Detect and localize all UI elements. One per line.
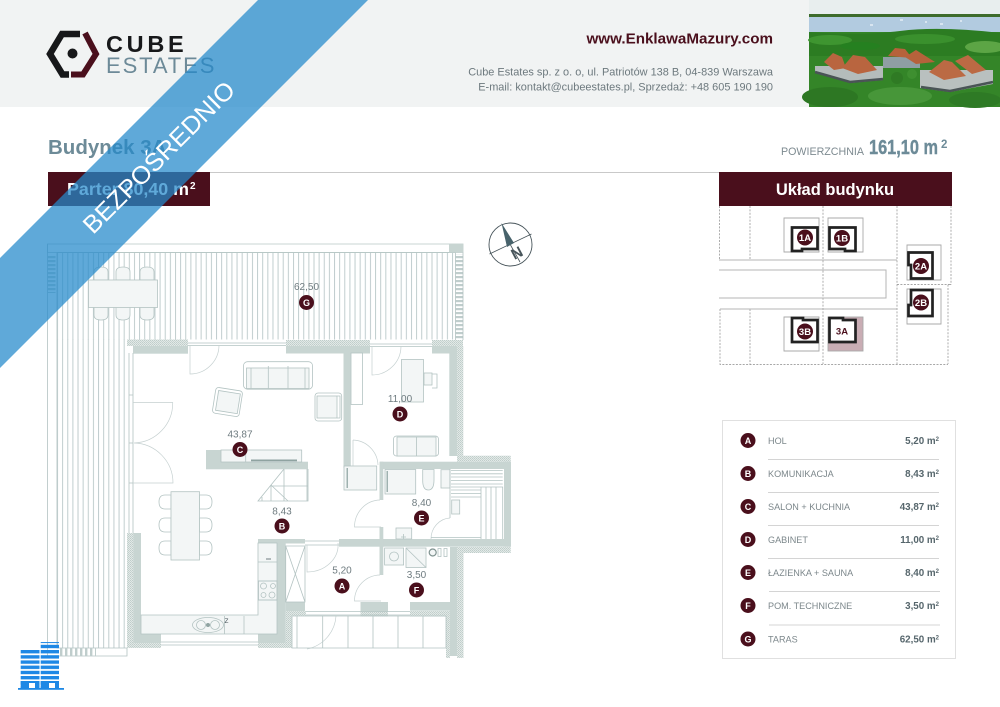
unit 3B: 3B bbox=[799, 327, 811, 338]
legend row C: 43,87 m bbox=[900, 502, 936, 513]
room marker D: 11,00 bbox=[388, 394, 413, 405]
unit 3A current: 3A bbox=[836, 326, 848, 338]
heading: building name: Budynek 3A bbox=[48, 136, 167, 159]
legend row G: TARAS bbox=[768, 634, 798, 644]
unit 2B bbox=[908, 290, 932, 316]
room marker A: A bbox=[339, 581, 346, 591]
total area: 2 bbox=[941, 139, 947, 151]
legend row G: 2 bbox=[936, 636, 940, 642]
armchair left bbox=[212, 387, 243, 417]
room marker G bbox=[294, 282, 319, 310]
website and contact text: www.EnklawaMazury.com bbox=[585, 30, 773, 48]
total area bbox=[781, 136, 947, 159]
room marker C bbox=[227, 430, 253, 457]
legend row G: G bbox=[744, 634, 752, 644]
bathroom fixtures bbox=[385, 470, 450, 539]
legend row E: ŁAZIENKA + SAUNA bbox=[768, 568, 854, 578]
diagonal banner bbox=[0, 0, 368, 368]
legend row D: 11,00 m bbox=[900, 535, 936, 546]
room marker B: 8,43 bbox=[272, 506, 292, 518]
legend row D: D bbox=[745, 535, 752, 545]
compass: N bbox=[508, 243, 526, 263]
icon: blue towers watermark bbox=[18, 642, 64, 690]
sofa bbox=[244, 362, 312, 389]
legend row F bbox=[740, 598, 940, 613]
armchair right bbox=[315, 393, 342, 421]
unit 3A current bbox=[830, 318, 856, 342]
floor plan bbox=[48, 244, 511, 658]
legend row B: KOMUNIKACJA bbox=[768, 469, 835, 479]
room marker F: F bbox=[414, 585, 420, 595]
legend row B: 8,43 m bbox=[905, 469, 936, 480]
room marker E: E bbox=[418, 513, 425, 523]
legend row E bbox=[740, 565, 940, 580]
legend row G bbox=[740, 632, 940, 646]
room legend panel bbox=[722, 420, 956, 658]
entrance steps bbox=[292, 616, 446, 648]
closet bbox=[351, 353, 362, 404]
room marker E: 8,40 bbox=[412, 498, 432, 509]
legend row F: F bbox=[745, 601, 751, 611]
kitchen counter: Z bbox=[224, 618, 228, 625]
kitchen island bbox=[221, 450, 302, 462]
website and contact text: Cube Estates sp. z o. o, ul. Patriotów 138 B, 04-839 Warszawa bbox=[468, 66, 774, 78]
website and contact text bbox=[468, 30, 774, 94]
unit 2B: 2B bbox=[915, 298, 927, 309]
sauna benches bbox=[431, 469, 503, 539]
legend row A: HOL bbox=[768, 436, 787, 446]
dining table and chairs bbox=[159, 492, 212, 560]
legend row C bbox=[740, 499, 940, 514]
photo: aerial render of houses by the lake bbox=[802, 0, 1000, 108]
header rule bbox=[48, 172, 952, 174]
room marker F: 3,50 bbox=[407, 570, 427, 581]
legend row A: 5,20 m bbox=[905, 436, 936, 447]
utility room equipment bbox=[385, 548, 447, 568]
room marker C: C bbox=[237, 445, 244, 455]
room marker G: G bbox=[303, 298, 310, 308]
legend row C: 2 bbox=[936, 503, 940, 509]
legend row E: 2 bbox=[936, 569, 940, 575]
logo: Cube Estates: ESTATES bbox=[106, 53, 216, 78]
legend row B: 2 bbox=[936, 470, 940, 476]
floor label bar bbox=[48, 172, 210, 206]
logo: Cube Estates bbox=[50, 31, 216, 78]
room marker G: 62,50 bbox=[294, 282, 319, 293]
shaft bbox=[286, 546, 305, 602]
legend row F: POM. TECHNICZNE bbox=[768, 601, 852, 611]
site layout heading bar bbox=[719, 172, 952, 206]
windows and glazing bbox=[129, 343, 432, 645]
legend row D bbox=[740, 532, 940, 547]
legend row E: E bbox=[745, 568, 751, 578]
total area: 161,10 m bbox=[869, 136, 938, 159]
header band bbox=[0, 0, 1000, 107]
unit 3B bbox=[792, 318, 818, 342]
compass bbox=[489, 223, 532, 266]
room marker B bbox=[272, 506, 292, 534]
legend row E: 8,40 m bbox=[905, 568, 936, 579]
building outlines bbox=[784, 218, 941, 351]
staircase bbox=[258, 469, 308, 501]
room marker B: B bbox=[279, 521, 286, 531]
office furniture bbox=[394, 360, 438, 456]
legend row C: C bbox=[745, 502, 752, 512]
legend row B bbox=[740, 466, 940, 481]
unit 1A bbox=[792, 228, 818, 251]
floor label bar: Parter 80,40 m bbox=[67, 179, 189, 199]
room marker F bbox=[407, 570, 427, 598]
legend row B: B bbox=[745, 469, 752, 479]
terrace table and chairs bbox=[88, 267, 158, 320]
room marker D bbox=[388, 394, 413, 422]
unit 2A bbox=[908, 252, 932, 278]
site layout plan bbox=[719, 206, 951, 365]
terrace decking bbox=[48, 244, 463, 656]
unit 2A: 2A bbox=[915, 262, 927, 272]
legend row A: 2 bbox=[936, 437, 940, 443]
doors bbox=[133, 345, 450, 649]
room marker C: 43,87 bbox=[227, 430, 253, 440]
room marker D: D bbox=[397, 409, 404, 419]
floor label bar: 2 bbox=[190, 181, 196, 192]
website and contact text: E-mail: kontakt@cubeestates.pl, Sprzedaż: +48 605 190 190 bbox=[478, 82, 773, 94]
legend row F: 2 bbox=[936, 602, 940, 608]
unit 1B bbox=[830, 228, 856, 251]
legend row G: 62,50 m bbox=[900, 634, 936, 646]
legend row D: 2 bbox=[936, 536, 940, 542]
unit 1B: 1B bbox=[836, 234, 848, 244]
living room furniture bbox=[212, 362, 342, 421]
room marker E bbox=[412, 498, 432, 526]
kitchen counter bbox=[141, 543, 277, 634]
legend row A: A bbox=[745, 436, 752, 446]
legend row D: GABINET bbox=[768, 535, 808, 545]
logo: Cube Estates: CUBE bbox=[106, 31, 187, 57]
unit 1A: 1A bbox=[799, 233, 811, 244]
legend row F: 3,50 m bbox=[905, 601, 936, 612]
exterior walls bbox=[127, 340, 511, 658]
diagonal banner: BEZPOŚREDNIO bbox=[76, 75, 241, 239]
legend row C: SALON + KUCHNIA bbox=[768, 502, 851, 512]
room marker A: 5,20 bbox=[332, 566, 352, 576]
legend row A bbox=[740, 433, 940, 448]
building 3A highlight bbox=[828, 317, 863, 351]
total area: POWIERZCHNIA bbox=[781, 146, 865, 158]
site layout heading bar: Układ budynku bbox=[776, 181, 894, 199]
room marker A bbox=[332, 566, 352, 594]
interior walls bbox=[206, 353, 383, 575]
wardrobe bbox=[344, 466, 377, 490]
